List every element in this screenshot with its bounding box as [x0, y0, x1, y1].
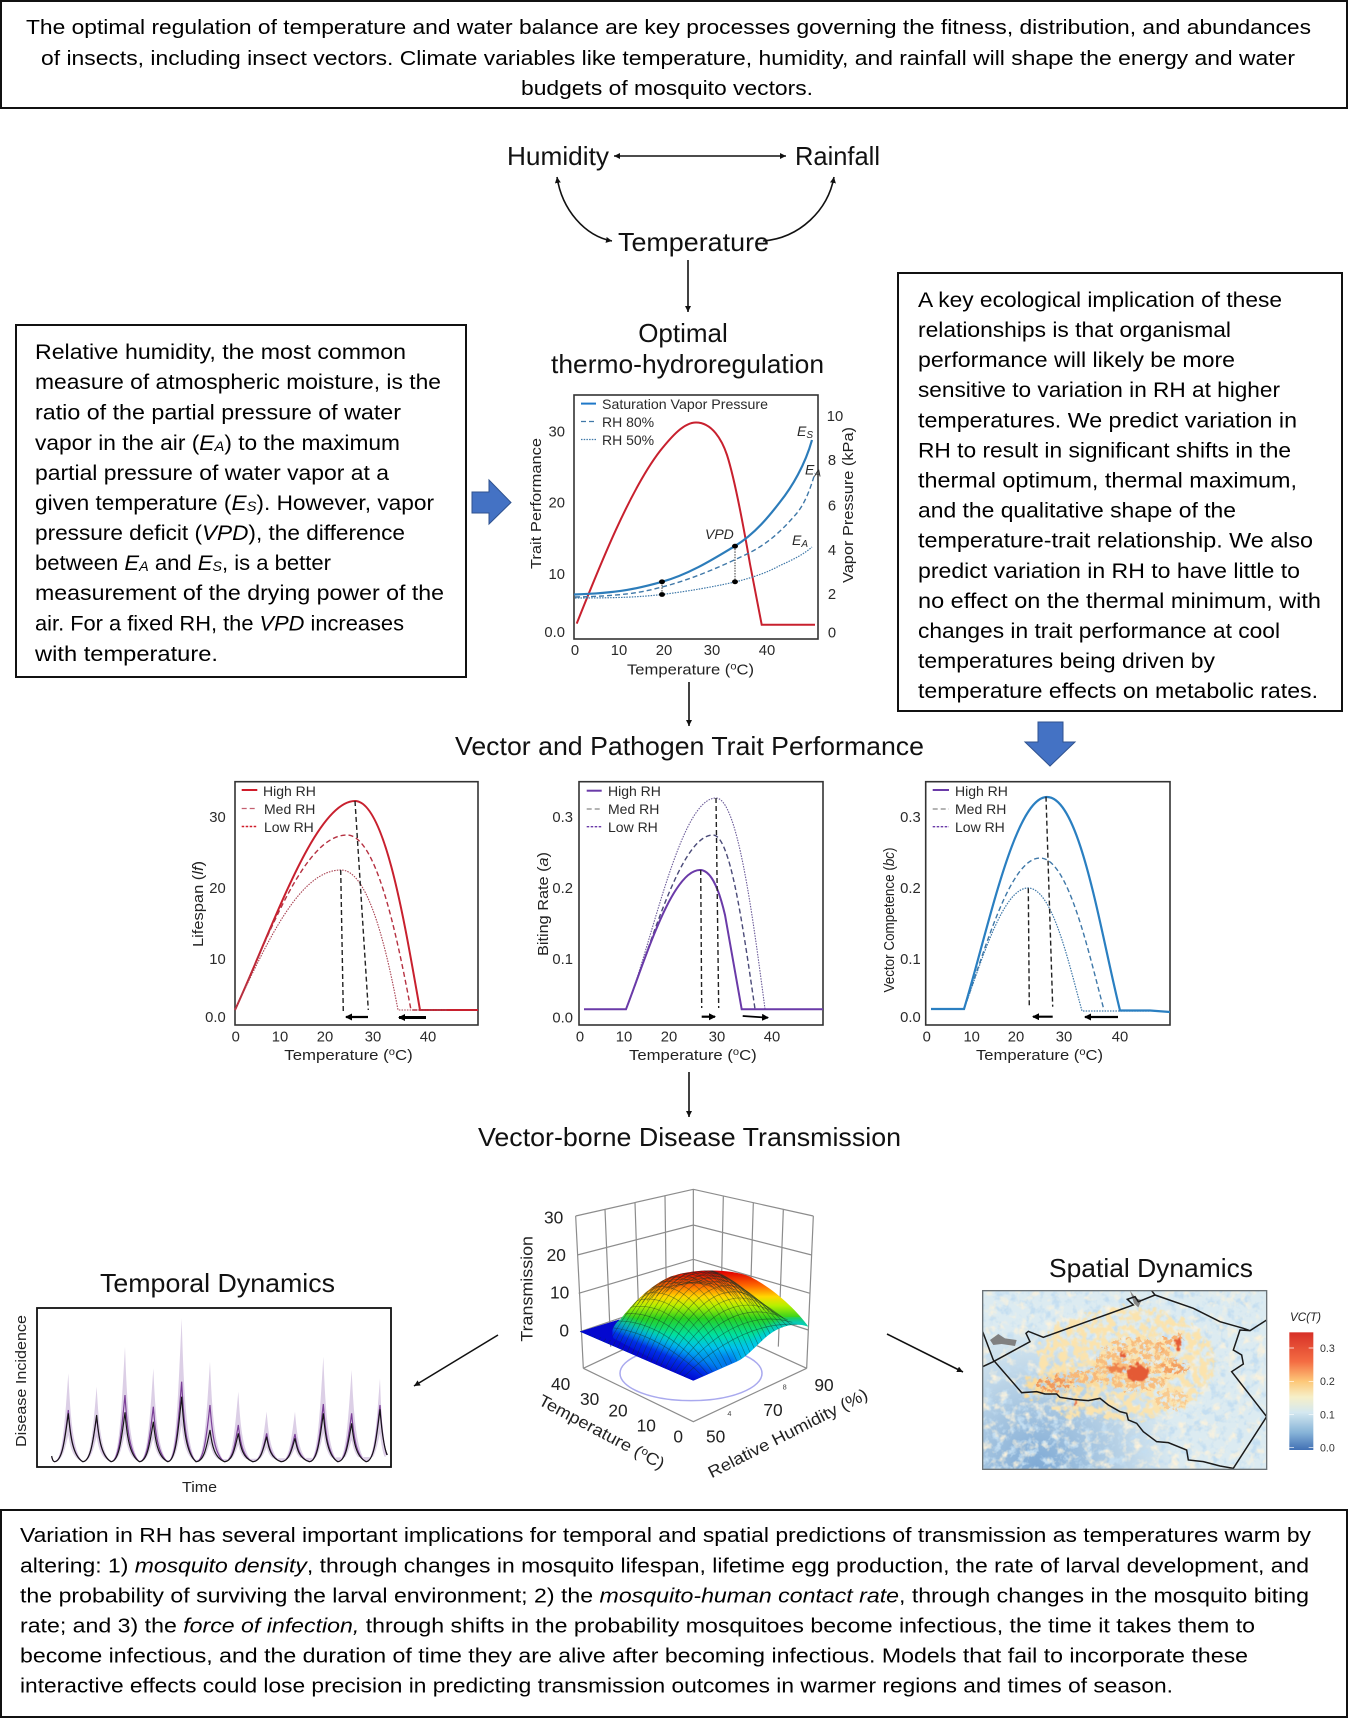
chart: trait performance and vapor pressure: 10: [611, 643, 627, 659]
heading: spatial dynamics: Spatial Dynamics: [1049, 1253, 1253, 1283]
chart: biting rate: o: [733, 1047, 740, 1058]
chart: temporal dynamics: [13, 1308, 391, 1496]
chart: 3D transmission surface: 0: [673, 1427, 683, 1447]
chart: lifespan: 0: [232, 1030, 240, 1046]
chart: trait performance and vapor pressure: [528, 395, 857, 678]
chart: 3D transmission surface: 30: [580, 1389, 599, 1409]
chart: trait performance and vapor pressure: RH 50%: [602, 432, 654, 448]
chart: trait performance and vapor pressure: 20: [549, 496, 565, 512]
chart: 3D transmission surface: 40: [551, 1374, 570, 1394]
chart: trait performance and vapor pressure: RH 80%: [602, 414, 654, 430]
chart: 3D transmission surface: 30: [544, 1207, 563, 1227]
chart: trait performance and vapor pressure: 0: [571, 643, 579, 659]
chart: 3D transmission surface: Relative Humidity (%): [705, 1385, 871, 1482]
panel: relative humidity text: measure of atmospheric moisture, is the: [35, 370, 441, 394]
chart: vector competence: o: [1079, 1047, 1086, 1058]
chart: vector competence: 30: [1056, 1030, 1072, 1046]
chart: 3D transmission surface: 0: [559, 1321, 569, 1341]
panel: relative humidity text: ). However, vapor: [256, 491, 434, 515]
chart: biting rate: 0.0: [552, 1011, 573, 1027]
chart: vector competence: C): [1085, 1047, 1103, 1064]
panel: relative humidity text: vapor in the air ( E: [35, 431, 214, 455]
diagram: climate variables: Humidity: [507, 141, 609, 171]
chart: trait performance and vapor pressure: o: [730, 662, 737, 672]
chart: temporal dynamics: Time: [182, 1479, 217, 1496]
panel: ecological implication text: thermal optimum, thermal maximum,: [918, 468, 1297, 492]
panel: introduction text: The optimal regulation of temperature and water balance are key processes governing the fitness, distribution, and abundances: [26, 16, 1311, 39]
chart: trait performance and vapor pressure: 8: [828, 453, 836, 469]
chart: trait performance and vapor pressure: 20: [656, 643, 672, 659]
arrow: transmission to temporal dynamics: [414, 1335, 498, 1386]
panel: ecological implication text: no effect on the thermal minimum, with: [918, 589, 1321, 613]
chart: biting rate: Med RH: [608, 801, 659, 817]
panel: implications text: rate; and 3) the force of infection, through shifts in the probability mosquitoes become infectious, the time it takes them to: [20, 1615, 1255, 1638]
chart: lifespan: Lifespan (lf): [190, 861, 207, 947]
chart: 3D transmission surface: 4: [727, 1409, 731, 1418]
chart: 3D transmission surface: Transmission: [518, 1236, 537, 1342]
panel: relative humidity text: A: [138, 558, 149, 574]
chart: trait performance and vapor pressure: C): [736, 662, 754, 678]
panel: relative humidity text: pressure deficit ( VPD), the difference: [35, 521, 405, 545]
chart: vector competence: 40: [1112, 1030, 1128, 1046]
chart: 3D transmission surface: C): [642, 1447, 668, 1473]
chart: 3D transmission surface: 10: [550, 1283, 569, 1303]
chart: lifespan: Low RH: [264, 819, 314, 835]
arrow: temperature to thermo-hydroregulation: [687, 260, 689, 312]
chart: biting rate: High RH: [608, 783, 661, 799]
chart: vector competence: 0.2: [900, 881, 921, 897]
chart: 3D transmission surface: o: [639, 1445, 651, 1459]
panel: relative humidity text: S: [212, 558, 223, 574]
panel: ecological implication text: changes in trait performance at cool: [918, 619, 1280, 643]
panel: implications text: interactive effects could lose precision in predicting transmission outcomes in warmer regions and times of season.: [20, 1675, 1173, 1698]
diagram: climate variables: [507, 141, 880, 257]
panel: relative humidity text: between E: [35, 551, 139, 575]
chart: trait performance and vapor pressure: Trait Performance: [528, 438, 545, 569]
chart: lifespan: C): [395, 1047, 413, 1064]
panel: relative humidity text: E: [198, 551, 213, 575]
chart: trait performance and vapor pressure: 0.0: [544, 625, 565, 641]
chart: lifespan: 20: [209, 881, 226, 897]
panel: ecological implication text: temperatures. We predict variation in: [918, 408, 1297, 432]
chart: trait performance and vapor pressure: E: [792, 532, 801, 548]
chart: 3D transmission surface: 50: [706, 1427, 725, 1447]
panel: ecological implication text: predict variation in RH to have little to: [918, 559, 1300, 583]
chart: trait performance and vapor pressure: 40: [759, 643, 775, 659]
chart: vector competence: Low RH: [955, 819, 1005, 835]
chart: vector competence: 20: [1008, 1030, 1024, 1046]
chart: trait performance and vapor pressure: VPD: [705, 526, 734, 542]
chart: trait performance and vapor pressure: Temperature (: [627, 662, 720, 678]
heading: optimal thermo-hydroregulation: [551, 318, 824, 379]
panel: relative humidity text: measurement of the drying power of the: [35, 581, 444, 605]
heading: optimal thermo-hydroregulation: thermo-hydroregulation: [551, 349, 824, 379]
chart: 3D transmission surface: 10: [637, 1416, 656, 1436]
panel: relative humidity text: with temperature.: [34, 642, 218, 666]
panel: implications text: altering: 1) mosquito density , through changes in mosquito lifespan, lifetime egg production, the rate of larval development, and: [20, 1555, 1309, 1578]
chart: 3D transmission surface: 90: [814, 1375, 834, 1395]
chart: 3D transmission surface: 20: [547, 1245, 566, 1265]
chart: trait performance and vapor pressure: A: [813, 468, 821, 480]
panel: implications text: the probability of surviving the larval environment; 2) the mosquito-human contact rate , through changes in the mosquito biting: [20, 1585, 1309, 1608]
panel: implications text: Variation in RH has several important implications for temporal and spatial predictions of transmission as temperatures warm by: [20, 1524, 1312, 1547]
heading: vector and pathogen trait performance: Vector and Pathogen Trait Performance: [455, 731, 924, 761]
panel: relative humidity text: and: [149, 551, 198, 575]
chart: biting rate: Temperature (: [629, 1047, 722, 1064]
chart: 3D transmission surface: 20: [608, 1401, 628, 1421]
chart: biting rate: [535, 782, 823, 1064]
panel: ecological implication text: RH to result in significant shifts in the: [918, 438, 1291, 462]
panel: relative humidity text: Relative humidity, the most common: [35, 340, 406, 364]
chart: lifespan: 30: [209, 810, 226, 826]
legend: VC(T) colour bar: 0.3: [1320, 1343, 1335, 1355]
chart: vector competence: Med RH: [955, 801, 1006, 817]
chart: lifespan: Temperature (: [284, 1047, 378, 1064]
heading: temporal dynamics: Temporal Dynamics: [100, 1268, 335, 1298]
diagram: climate variables: Temperature: [618, 227, 769, 257]
chart: trait performance and vapor pressure: Saturation Vapor Pressure: [602, 396, 768, 412]
chart: trait performance and vapor pressure: S: [806, 430, 813, 441]
chart: 3D transmission surface: Temperature (: [535, 1391, 636, 1456]
arrow: trait performance to transmission: [688, 1072, 690, 1117]
panel: ecological implication text: relationships is that organismal: [918, 318, 1231, 342]
chart: trait performance and vapor pressure: E: [805, 462, 814, 478]
chart: biting rate: Biting Rate (a): [535, 852, 552, 956]
chart: vector competence: [881, 782, 1170, 1064]
chart: biting rate: 40: [764, 1030, 780, 1046]
panel: relative humidity text: partial pressure of water vapor at a: [35, 461, 389, 485]
panel: relative humidity text: S: [247, 498, 257, 514]
legend: VC(T) colour bar: 0.2: [1320, 1376, 1335, 1388]
panel: relative humidity text: [16, 325, 466, 677]
diagram: climate variables: Rainfall: [795, 141, 880, 171]
panel: ecological implication text: [898, 273, 1342, 711]
chart: trait performance and vapor pressure: 4: [828, 543, 836, 559]
chart: vector competence: 0: [923, 1030, 931, 1046]
panel: ecological implication text: performance will likely be more: [918, 348, 1235, 372]
chart: trait performance and vapor pressure: 6: [828, 498, 836, 514]
chart: biting rate: 30: [709, 1030, 725, 1046]
chart: vector competence: 0.3: [900, 810, 921, 826]
chart: biting rate: C): [739, 1047, 757, 1064]
legend: VC(T) colour bar: VC(T): [1290, 1311, 1321, 1324]
arrow: blue block arrow right: [472, 480, 511, 524]
panel: relative humidity text: , is a better: [222, 551, 331, 575]
chart: biting rate: 0.1: [552, 952, 573, 968]
chart: biting rate: 20: [661, 1030, 677, 1046]
chart: trait performance and vapor pressure: 10: [549, 567, 565, 583]
panel: introduction text: of insects, including insect vectors. Climate variables like temperature, humidity, and rainfall will shape the energy and water: [41, 47, 1295, 70]
panel: ecological implication text: temperature effects on metabolic rates.: [918, 679, 1318, 703]
arrow: blue block arrow down: [1025, 722, 1075, 766]
panel: relative humidity text: air. For a fixed RH, the VPD increases: [35, 612, 404, 636]
chart: lifespan: o: [389, 1047, 395, 1058]
chart: vector competence: 10: [963, 1030, 980, 1046]
chart: vector competence: Temperature (: [976, 1047, 1069, 1064]
chart: trait performance and vapor pressure: 30: [549, 424, 565, 440]
panel: ecological implication text: A key ecological implication of these: [918, 288, 1282, 312]
chart: lifespan: 40: [420, 1030, 436, 1046]
chart: 3D transmission surface: [518, 1189, 871, 1482]
panel: introduction text: budgets of mosquito vectors.: [521, 77, 813, 100]
chart: temporal dynamics: Disease Incidence: [13, 1315, 30, 1447]
chart: lifespan: [190, 782, 478, 1064]
chart: lifespan: 20: [317, 1030, 333, 1046]
chart: biting rate: 0: [576, 1030, 584, 1046]
chart: 3D transmission surface: 70: [763, 1400, 783, 1420]
chart: 3D transmission surface: 8: [783, 1382, 787, 1391]
chart: vector competence: 0.1: [900, 952, 921, 968]
chart: trait performance and vapor pressure: 10: [827, 409, 843, 425]
panel: relative humidity text: A: [213, 438, 224, 454]
panel: relative humidity text: ) to the maximum: [224, 431, 400, 455]
legend: VC(T) colour bar: [1289, 1311, 1335, 1455]
panel: introduction text: [1, 1, 1347, 108]
arrow: transmission to spatial dynamics: [887, 1334, 963, 1372]
heading: vector-borne disease transmission: Vector-borne Disease Transmission: [478, 1122, 901, 1152]
heading: optimal thermo-hydroregulation: Optimal: [638, 318, 728, 348]
chart: lifespan: Med RH: [264, 801, 315, 817]
chart: trait performance and vapor pressure: Vapor Pressure (kPa): [840, 427, 857, 583]
legend: VC(T) colour bar: 0.1: [1320, 1409, 1335, 1421]
panel: implications text: become infectious, and the duration of time they are alive after becoming infectious. Models that fail to incorporate these: [20, 1645, 1248, 1668]
chart: spatial dynamics map: [983, 1291, 1335, 1469]
chart: vector competence: Vector Competence (bc): [881, 848, 898, 992]
chart: lifespan: High RH: [263, 783, 316, 799]
panel: ecological implication text: sensitive to variation in RH at higher: [918, 378, 1280, 402]
chart: trait performance and vapor pressure: 0: [828, 626, 836, 642]
chart: biting rate: 10: [616, 1030, 632, 1046]
chart: trait performance and vapor pressure: 30: [704, 643, 720, 659]
chart: biting rate: 0.2: [552, 881, 573, 897]
chart: lifespan: 10: [272, 1030, 288, 1046]
legend: VC(T) colour bar: 0.0: [1320, 1443, 1335, 1455]
chart: biting rate: Low RH: [608, 819, 658, 835]
panel: ecological implication text: temperatures being driven by: [918, 649, 1215, 673]
chart: trait performance and vapor pressure: 2: [828, 587, 836, 603]
panel: ecological implication text: temperature-trait relationship. We also: [918, 528, 1313, 552]
chart: lifespan: 0.0: [205, 1010, 226, 1026]
chart: trait performance and vapor pressure: A: [800, 539, 808, 550]
chart: trait performance and vapor pressure: E: [797, 423, 806, 439]
panel: ecological implication text: and the qualitative shape of the: [918, 498, 1236, 522]
chart: vector competence: 0.0: [900, 1010, 921, 1026]
panel: relative humidity text: ratio of the partial pressure of water: [35, 400, 401, 424]
chart: biting rate: 0.3: [552, 810, 573, 826]
chart: lifespan: 30: [365, 1030, 381, 1046]
panel: relative humidity text: given temperature ( E: [35, 491, 246, 515]
chart: vector competence: High RH: [955, 783, 1008, 799]
arrow: thermo-hydroregulation to trait performance: [688, 682, 690, 726]
chart: lifespan: 10: [209, 952, 226, 968]
panel: implications text: [1, 1510, 1347, 1717]
